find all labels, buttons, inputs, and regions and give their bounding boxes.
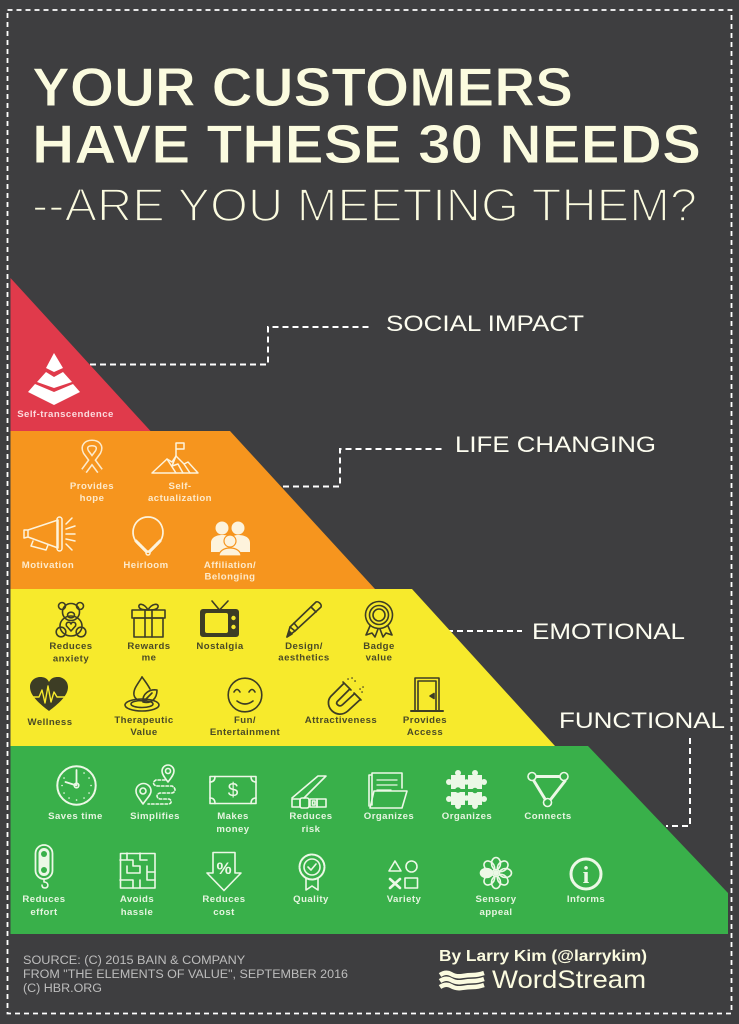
need: Heirloom <box>123 517 169 571</box>
label: Organizes <box>442 811 492 822</box>
icon: maze <box>120 853 155 888</box>
need: Nostalgia <box>196 601 244 652</box>
need: Affiliation/Belonging <box>204 522 256 582</box>
icon: door <box>411 678 443 711</box>
icon: banknote: $ <box>228 780 239 802</box>
label: Wellness <box>27 717 73 728</box>
label: Heirloom <box>123 560 169 571</box>
label: risk <box>302 824 321 835</box>
need: Reduces effort <box>22 845 66 918</box>
label: Organizes <box>364 811 414 822</box>
need: Quality <box>293 854 329 905</box>
icon: pencil <box>287 602 321 637</box>
source text: FROM "THE ELEMENTS OF VALUE", SEPTEMBER 2016 <box>23 969 348 981</box>
icon: pyramid <box>28 353 80 405</box>
label: Self- <box>168 481 192 492</box>
need: Simplifies <box>130 765 180 822</box>
icon: smiley <box>228 678 262 712</box>
icon: people <box>211 522 250 556</box>
source text: SOURCE: (C) 2015 BAIN & COMPANY <box>23 955 246 967</box>
need: Connects <box>524 772 572 822</box>
panel: functional green tier <box>10 746 728 934</box>
source text: (C) HBR.ORG <box>23 983 102 995</box>
need: Motivation <box>22 517 75 571</box>
label: appeal <box>479 907 513 918</box>
icon: heart with pulse <box>30 677 68 711</box>
icon: television <box>200 601 239 637</box>
label: actualization <box>148 493 212 504</box>
need: Design/aesthetics <box>278 602 330 664</box>
icon: megaphone <box>24 517 75 551</box>
wordstream logo <box>440 966 646 994</box>
label: hassle <box>121 907 153 918</box>
need: Provides hope <box>70 443 114 504</box>
label: Fun/ <box>234 715 256 726</box>
label: me <box>142 652 156 664</box>
icon: clock <box>57 766 96 805</box>
label: Motivation <box>22 560 74 571</box>
label: money <box>216 824 250 835</box>
icon: rosette badge <box>366 602 392 637</box>
need: Makes money <box>210 776 256 835</box>
panel: life changing orange tier <box>10 431 375 589</box>
label: Therapeutic <box>114 715 174 726</box>
icon: horseshoe magnet <box>333 678 363 710</box>
icon: necklace <box>133 517 163 555</box>
need: Rewards me <box>127 604 171 664</box>
icon: puzzle pieces <box>446 770 487 809</box>
label: Informs <box>567 894 605 905</box>
label: Connects <box>524 811 572 822</box>
label: Reduces <box>202 894 246 905</box>
label: Avoids <box>120 894 154 905</box>
label: Attractiveness <box>305 715 377 726</box>
label: Reduces <box>289 811 333 822</box>
title: YOUR CUSTOMERS <box>32 56 573 118</box>
need: Attractiveness <box>305 678 377 726</box>
wordmark: WordStream <box>492 966 646 994</box>
label: Reduces <box>22 894 66 905</box>
icon: mountain with flag <box>152 443 198 473</box>
icon: teddy bear <box>56 602 86 637</box>
icon: percent down arrow: % <box>216 859 232 878</box>
label: cost <box>213 907 235 918</box>
icon: route pins <box>136 765 175 804</box>
label: Saves time <box>48 811 103 822</box>
label: Self-transcendence: Self-transcendence <box>17 409 114 420</box>
need: Reduces risk <box>289 776 333 835</box>
panel: emotional yellow tier <box>10 589 555 746</box>
need: Sensory appeal <box>475 858 517 918</box>
label: Variety <box>387 894 422 905</box>
label: Reduces <box>49 641 93 652</box>
need: Organizes (puzzle) <box>442 770 492 822</box>
label: aesthetics <box>278 652 330 664</box>
title: --ARE YOU MEETING THEM? <box>32 179 697 231</box>
icon: ribbon <box>84 443 100 471</box>
icon: drop and leaf <box>125 677 159 711</box>
label: Belonging <box>205 572 255 582</box>
icon: gift box <box>132 604 165 637</box>
tier label: functional: FUNCTIONAL <box>559 708 725 733</box>
byline: By Larry Kim (@larrykim) <box>439 948 647 965</box>
need: Avoids hassle <box>120 853 155 918</box>
title <box>32 56 701 231</box>
icon: seat belt <box>292 776 326 808</box>
need: Therapeutic Value <box>114 677 174 738</box>
icon: connected triangle <box>528 772 568 806</box>
label: Nostalgia <box>196 641 244 652</box>
need: Badge value <box>363 602 395 664</box>
icon: flower <box>480 858 512 888</box>
tier label: life changing <box>283 432 656 486</box>
icon: folder <box>369 773 407 808</box>
tier label: emotional: EMOTIONAL <box>532 619 685 644</box>
label: Design/ <box>285 641 323 652</box>
tier label: social impact <box>90 311 584 364</box>
label: Rewards <box>127 641 171 652</box>
label: Sensory <box>475 894 517 905</box>
panel: self-transcendence red tier <box>10 278 150 431</box>
need: Self-actualization <box>148 443 212 504</box>
tier label: social impact: SOCIAL IMPACT <box>386 311 584 336</box>
label: value <box>366 652 392 664</box>
icon: shapes <box>389 861 418 888</box>
label: Value <box>130 727 158 738</box>
need: Reduces anxiety <box>49 602 93 664</box>
title: HAVE THESE 30 NEEDS <box>32 113 701 175</box>
label: Badge <box>363 641 395 652</box>
need: Wellness <box>27 677 73 728</box>
label: hope <box>80 493 104 504</box>
need: Saves time <box>48 766 103 822</box>
icon: lever switch <box>36 845 52 888</box>
tier label: functional <box>559 708 725 826</box>
label: Quality <box>293 894 329 905</box>
label: Entertainment <box>210 727 281 738</box>
need: Reduces cost <box>202 852 246 918</box>
need: Organizes (folder) <box>364 773 414 822</box>
label: Simplifies <box>130 811 180 822</box>
icon: waves <box>440 973 484 988</box>
icon: info circle: i <box>583 863 590 889</box>
label: anxiety <box>53 654 89 664</box>
need: Fun/Entertainment <box>210 678 281 738</box>
label: Provides <box>403 715 447 726</box>
tier label: life changing: LIFE CHANGING <box>455 432 656 457</box>
label: Provides <box>70 481 114 492</box>
icon: quality rosette <box>300 854 324 890</box>
label: Access <box>407 727 443 738</box>
need: Provides Access <box>403 678 447 738</box>
need: Informs <box>567 859 605 905</box>
label: Makes <box>217 811 249 822</box>
need: Variety <box>387 861 422 905</box>
label: effort <box>30 907 58 918</box>
label: Affiliation/ <box>204 560 256 571</box>
